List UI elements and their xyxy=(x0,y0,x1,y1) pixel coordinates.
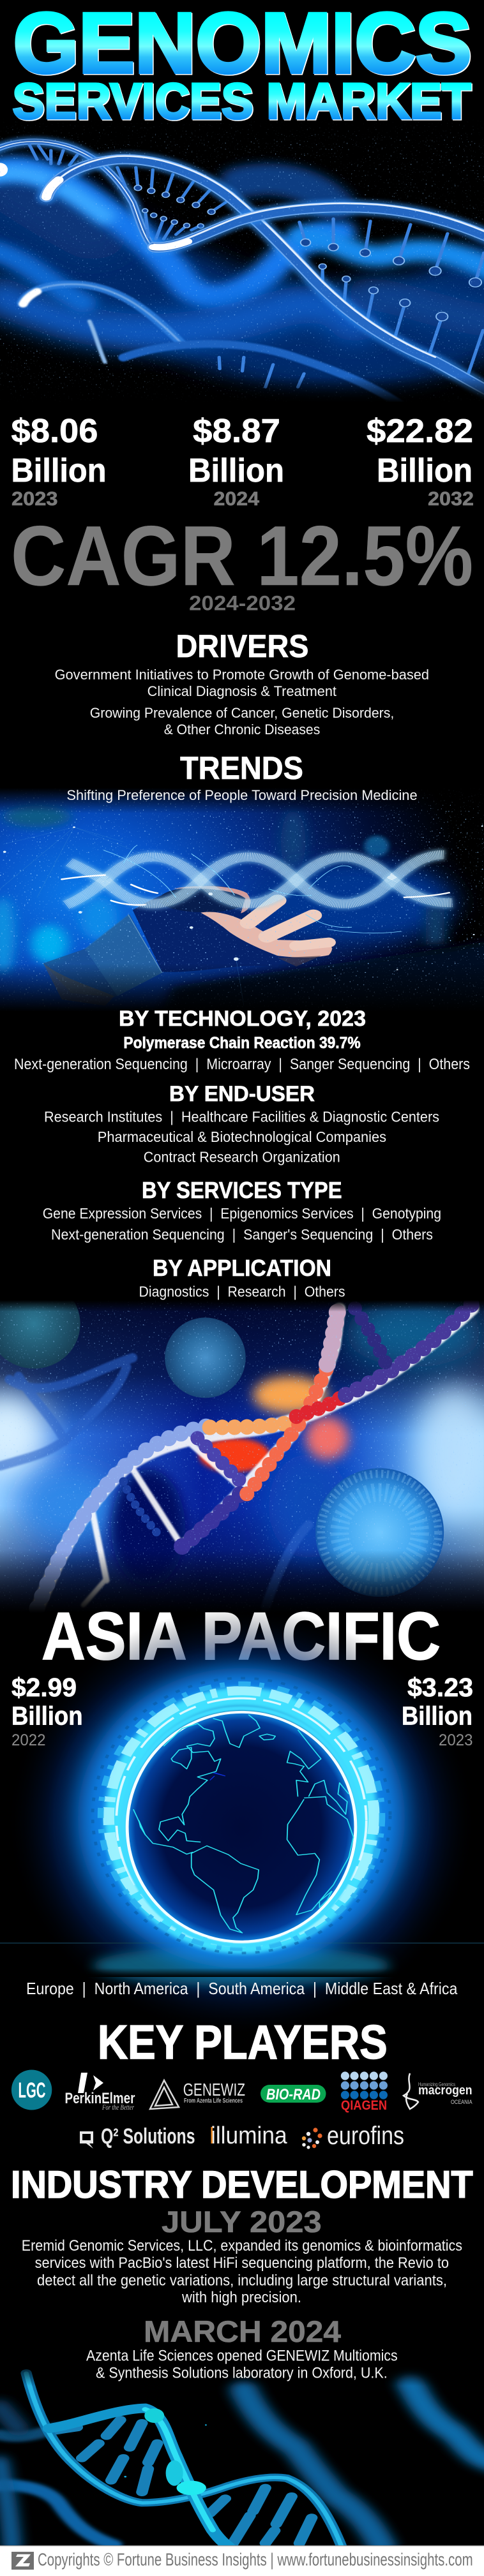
image: colourful DNA and cells xyxy=(0,1300,484,1610)
logo: Q2 Solutions xyxy=(80,2124,195,2149)
CAGR period: 2024-2032 xyxy=(189,592,296,615)
main strand B xyxy=(155,207,484,248)
title line 2: SERVICES MARKET xyxy=(13,73,472,130)
logo: LGC: LGC xyxy=(18,2078,46,2103)
logo: Illumina: illumina xyxy=(211,2122,287,2149)
sleeve xyxy=(43,914,162,1006)
particle specks xyxy=(115,810,460,919)
floor reflection xyxy=(0,1943,484,1986)
stat 2023: $8.06 xyxy=(11,413,98,450)
hero image: blue DNA helix xyxy=(0,118,484,403)
logo: GENEWIZ: From Azenta Life Sciences xyxy=(184,2098,243,2105)
logo: LGC xyxy=(11,2069,52,2110)
drivers xyxy=(55,628,429,737)
by end-user: Pharmaceutical & Biotechnological Companies xyxy=(98,1129,386,1145)
asia pacific 2022 value xyxy=(11,1673,83,1749)
development: July 2023: with high precision. xyxy=(181,2289,301,2306)
blurred background strands xyxy=(0,2384,484,2547)
asia pacific 2023 value: 2023 xyxy=(439,1731,473,1749)
asia pacific 2023 value: Billion xyxy=(402,1701,473,1730)
glowing globe xyxy=(0,1608,484,2036)
by services type xyxy=(43,1177,441,1243)
development: March 2024: MARCH 2024 xyxy=(144,2314,341,2348)
logo: Macrogen: OCEANIA xyxy=(451,2099,473,2105)
drivers: Government Initiatives to Promote Growth of Genome-based xyxy=(55,667,429,683)
asia pacific 2023 value: $3.23 xyxy=(407,1673,473,1702)
by services type: Next-generation Sequencing | Sanger's Sequencing | Others xyxy=(51,1226,433,1243)
dark navy halo xyxy=(7,1608,476,2036)
by services type: BY SERVICES TYPE xyxy=(142,1177,342,1203)
logo: Qiagen: QIAGEN xyxy=(341,2098,387,2113)
development: March 2024 xyxy=(86,2314,398,2382)
continents outline xyxy=(133,1715,353,1933)
by technology: Polymerase Chain Reaction 39.7% xyxy=(123,1034,361,1052)
stat 2023 xyxy=(11,413,106,510)
stat 2032: 2032 xyxy=(428,487,474,510)
drivers: & Other Chronic Diseases xyxy=(164,722,320,737)
drivers: DRIVERS xyxy=(176,628,309,664)
logo: Bio-Rad: BIO-RAD xyxy=(266,2086,321,2103)
image: teal DNA xyxy=(0,2360,484,2547)
asia pacific 2022 value: 2022 xyxy=(11,1731,46,1749)
bright strand tips xyxy=(47,180,59,197)
logo: PerkinElmer xyxy=(65,2073,135,2112)
soft glows xyxy=(0,1299,484,1587)
DNA strand backbones xyxy=(26,2373,341,2547)
market size stats xyxy=(11,413,474,510)
stat 2024: Billion xyxy=(188,452,284,489)
image: hand holding particle DNA xyxy=(0,783,484,1027)
by end-user: Research Institutes | Healthcare Facilities & Diagnostic Centers xyxy=(44,1109,439,1125)
logo: GENEWIZ: GENEWIZ xyxy=(183,2080,245,2099)
light blobs xyxy=(0,806,454,974)
star speckles xyxy=(0,118,484,402)
development: July 2023: detect all the genetic variations, including large structural variants, xyxy=(37,2272,447,2289)
trends: Shifting Preference of People Toward Precision Medicine xyxy=(66,787,418,803)
by services type: Gene Expression Services | Epigenomics Services | Genotyping xyxy=(43,1205,441,1222)
stat 2024: 2024 xyxy=(213,487,260,510)
stat 2032 xyxy=(367,413,474,510)
soft particles xyxy=(0,1416,160,1493)
stat 2023: 2023 xyxy=(11,487,57,510)
stat 2023: Billion xyxy=(11,452,106,489)
stat 2032: Billion xyxy=(377,452,473,489)
by technology: BY TECHNOLOGY, 2023 xyxy=(119,1007,366,1031)
development: July 2023: JULY 2023 xyxy=(162,2205,322,2239)
key player logos xyxy=(11,2069,473,2150)
development: July 2023: services with PacBio's latest HiFi sequencing platform, the Revio to xyxy=(35,2254,449,2272)
logo: Macrogen xyxy=(404,2073,473,2109)
dark lower-right xyxy=(163,939,484,1008)
asia pacific 2022 value: Billion xyxy=(11,1701,83,1730)
logo: PerkinElmer: For the Better xyxy=(102,2103,134,2112)
DNA rungs xyxy=(56,2420,312,2543)
asia pacific heading: ASIA PACIFIC xyxy=(42,1599,441,1674)
development: March 2024: Azenta Life Sciences opened GENEWIZ Multiomics xyxy=(86,2348,398,2364)
blurred background ribbons xyxy=(0,169,484,342)
footer xyxy=(0,2545,484,2576)
by technology xyxy=(14,1007,470,1073)
globe disk xyxy=(127,1712,356,1942)
logo: PerkinElmer: PerkinElmer xyxy=(65,2090,135,2107)
DNA glow backing xyxy=(37,1308,473,1610)
main strand A xyxy=(47,159,484,394)
stat 2032: $22.82 xyxy=(367,413,473,450)
DNA beads left xyxy=(37,1426,244,1608)
DNA beads right xyxy=(345,1304,473,1395)
drivers: Clinical Diagnosis & Treatment xyxy=(147,683,337,699)
logo: Macrogen: macrogen xyxy=(418,2084,473,2098)
glow ring xyxy=(93,1678,390,1953)
asia pacific 2023 value xyxy=(402,1673,473,1749)
trends xyxy=(66,750,418,803)
hand xyxy=(133,885,332,972)
logo: GENEWIZ xyxy=(150,2080,245,2109)
logo: Eurofins: eurofins xyxy=(327,2122,404,2150)
by application: Diagnostics | Research | Others xyxy=(139,1284,345,1300)
footer logo xyxy=(11,2552,34,2570)
drivers: Growing Prevalence of Cancer, Genetic Disorders, xyxy=(90,705,394,721)
asia pacific 2022 value: $2.99 xyxy=(11,1673,77,1702)
base pair rungs xyxy=(29,145,484,387)
by end-user: Contract Research Organization xyxy=(144,1148,340,1165)
development: March 2024: & Synthesis Solutions laboratory in Oxford, U.K. xyxy=(96,2364,388,2382)
by end-user: BY END-USER xyxy=(169,1082,315,1106)
logo: Macrogen: Humanizing Genomics xyxy=(418,2082,455,2087)
strands xyxy=(0,142,398,403)
key players heading: KEY PLAYERS xyxy=(98,2015,388,2069)
cell spheres xyxy=(0,1279,444,1597)
particle DNA xyxy=(0,827,452,1006)
logo: Qiagen xyxy=(341,2071,388,2113)
stat 2024: $8.87 xyxy=(193,413,280,450)
stat 2024 xyxy=(188,413,284,510)
title line 2: SERVICES MARKET xyxy=(13,73,471,129)
black fade around globe floor xyxy=(0,1968,484,1977)
logo: Q2 Solutions: Q² Solutions xyxy=(101,2124,195,2149)
logo: Eurofins xyxy=(302,2122,404,2150)
title xyxy=(13,0,473,130)
rung ball ends xyxy=(134,185,481,321)
by application xyxy=(139,1255,345,1300)
DNA beads centre xyxy=(210,1308,343,1494)
trends: TRENDS xyxy=(180,750,303,786)
by end-user xyxy=(44,1082,439,1165)
by application: BY APPLICATION xyxy=(153,1255,331,1281)
faint background helix xyxy=(0,1358,308,1608)
development: July 2023 xyxy=(22,2205,462,2306)
